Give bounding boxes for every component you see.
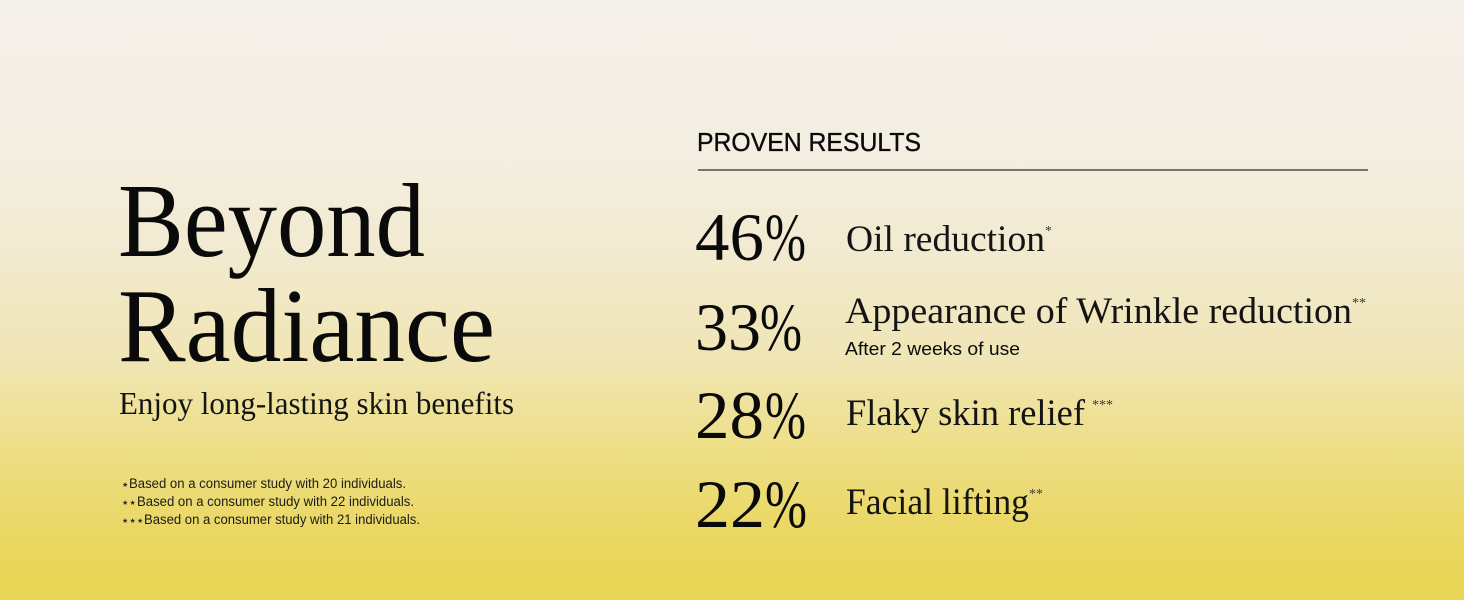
result: oil reduction: % (765, 199, 806, 275)
title (118, 162, 495, 384)
result: facial lifting: % (765, 466, 807, 542)
result: facial lifting: 22 (695, 466, 765, 542)
footnotes (122, 476, 420, 527)
title: Beyond (118, 162, 425, 279)
footnotes: ★★ (122, 499, 136, 507)
result: wrinkle reduction: ** (1352, 296, 1366, 311)
result: wrinkle reduction: After 2 weeks of use (845, 339, 1020, 359)
subtitle: Enjoy long-lasting skin benefits (119, 385, 514, 421)
title: Radiance (118, 267, 495, 384)
result: oil reduction: * (1045, 224, 1052, 239)
result: flaky skin relief: % (765, 377, 806, 453)
result: wrinkle reduction: % (760, 289, 802, 365)
result: oil reduction (695, 199, 1052, 275)
result: wrinkle reduction: 33 (695, 289, 761, 365)
heading rule (698, 169, 1368, 171)
result: flaky skin relief: *** (1092, 398, 1113, 413)
result: facial lifting: ** (1029, 487, 1043, 502)
footnotes: Based on a consumer study with 21 individuals. (144, 512, 420, 527)
footnotes: Based on a consumer study with 22 individuals. (137, 494, 414, 509)
result: oil reduction: 46 (695, 199, 764, 275)
section heading: PROVEN RESULTS (697, 127, 921, 157)
result: flaky skin relief: Flaky skin relief (846, 393, 1086, 434)
panel: headline (118, 162, 514, 421)
result: facial lifting (695, 466, 1043, 542)
result: flaky skin relief: 28 (695, 377, 764, 453)
result: flaky skin relief (695, 377, 1113, 453)
result: wrinkle reduction: Appearance of Wrinkle reduction (845, 291, 1352, 332)
result: facial lifting: Facial lifting (846, 482, 1029, 523)
footnotes: ★★★ (122, 517, 143, 525)
footnotes: Based on a consumer study with 20 individuals. (129, 476, 406, 491)
footnotes: ★ (122, 481, 128, 489)
result: wrinkle reduction (695, 289, 1366, 365)
result: oil reduction: Oil reduction (846, 219, 1045, 260)
panel: proven results (695, 127, 1368, 542)
